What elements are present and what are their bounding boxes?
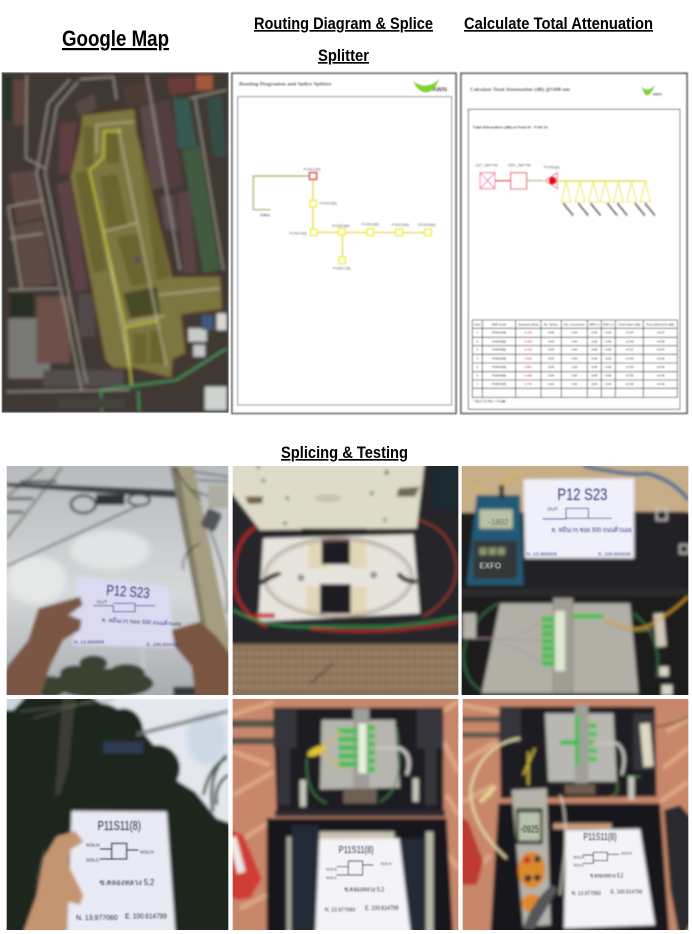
splitter routing schematic: P10S13(8) — [319, 201, 337, 205]
heading: Routing Diagram & Splice Splitter: Splitter — [318, 47, 370, 65]
splitter routing schematic: P10S12(8) — [289, 232, 307, 236]
attenuation table: -17.29 — [625, 382, 634, 386]
meter reading and EXFO brand text: -1802 — [488, 518, 509, 527]
attenuation table: P10S17(8) — [492, 382, 506, 386]
attenuation table: 2 — [476, 339, 478, 343]
attenuation table: 0.00 — [548, 374, 554, 378]
attenuation table: 3 — [476, 348, 478, 352]
green feeder line — [101, 348, 227, 412]
splitter routing schematic: P10S15(8) — [392, 223, 409, 227]
handwritten label: OUT — [97, 599, 107, 605]
handwritten label: N. 13.977060 — [325, 908, 355, 914]
handwritten label: ต. หมื่นเวๆ ซอย 500 ถนนติ่วนอย — [552, 525, 632, 534]
attenuation table: 0.00 — [548, 331, 554, 335]
attenuation table: 0.00 — [548, 339, 554, 343]
attenuation table: 0.989 — [525, 374, 532, 378]
attenuation table: P10S15(8) — [492, 365, 506, 369]
splitter routing schematic: Inline — [260, 212, 271, 217]
photo: closure with splitter and label — [232, 699, 458, 930]
attenuation table: 9.00 — [591, 374, 598, 378]
attenuation table: -14.32 — [656, 365, 665, 369]
attenuation table: -14.29 — [656, 339, 665, 343]
splitter routing schematic: P10S23(8) — [332, 224, 349, 228]
attenuation table: 0.355 — [525, 339, 532, 343]
handwritten label — [325, 845, 399, 914]
icon: AWN logo — [413, 79, 448, 94]
attenuation table: 9.00 — [591, 382, 598, 386]
handwritten label — [76, 819, 167, 922]
yellow routing line — [89, 131, 158, 385]
attenuation table — [472, 320, 677, 403]
heading: Google Map: Google Map — [62, 26, 169, 51]
handwritten label: SOLC — [573, 863, 584, 868]
splitter routing schematic: P10S16(8) — [418, 223, 435, 227]
icon: AWN logo: AWN — [432, 87, 448, 94]
meter reading: -0925 — [520, 824, 539, 835]
attenuation table: P10S12(8) — [492, 339, 506, 343]
roads outside the coverage area — [7, 75, 227, 392]
attenuation table: 4.00 — [571, 374, 578, 378]
attenuation table: 9.00 — [605, 356, 612, 360]
handwritten label: N. 13.860009 — [74, 639, 104, 645]
attenuation table: 4.00 — [571, 356, 578, 360]
diagram title: Routing Diagramm and Splice Splitter — [239, 82, 332, 88]
road lines inside coverage area — [97, 122, 220, 370]
attenuation table: 9.00 — [605, 348, 612, 352]
attenuation table: -14.30 — [656, 356, 665, 360]
optical path schematic: OLT_SMTTM — [476, 163, 498, 167]
splitter routing schematic: P10S14(8) — [361, 223, 379, 227]
attenuation table: 4.00 — [571, 382, 578, 386]
handwritten label: SOLN — [86, 843, 100, 849]
attenuation table: 9.00 — [591, 348, 598, 352]
attenuation table: 0.867 — [525, 365, 532, 369]
panel: calculate total attenuation — [461, 73, 687, 413]
optical path schematic — [476, 163, 655, 216]
attenuation table: SDP L1 — [589, 322, 600, 326]
handwritten label: E. 100.614799 — [611, 889, 642, 895]
handwritten label: ซ.คลองหลวง 5,2 — [344, 887, 385, 894]
attenuation table: -17.27 — [625, 331, 634, 335]
attenuation table: 0.805 — [525, 356, 532, 360]
attenuation table: 9.00 — [591, 339, 598, 343]
splitter routing schematic: P10S17(8) — [333, 266, 350, 270]
heading: Calculate Total Attenuation: Calculate Total Attenuation — [464, 15, 653, 33]
handwritten label — [74, 583, 181, 648]
photo: closure with power meter — [462, 699, 688, 930]
attenuation table: -14.27 — [656, 348, 665, 352]
attenuation table: SDP L2 — [603, 322, 614, 326]
terrain and building rows — [3, 75, 227, 410]
handwritten label: E. 100.604038 — [147, 642, 179, 648]
attenuation table: 9.00 — [591, 331, 598, 335]
handwritten label: SOLC — [86, 858, 100, 864]
handwritten label: ซ.คลองหลวง 5,2 — [590, 873, 624, 880]
handwritten label: SOLH — [140, 849, 154, 855]
attenuation table: -17.29 — [625, 339, 634, 343]
icon: AWN logo small — [641, 85, 662, 96]
panel: Google Map satellite view — [2, 72, 229, 413]
handwritten label: SOLH — [381, 861, 392, 866]
attenuation table: 7 — [476, 382, 478, 386]
panel: routing diagram — [232, 73, 456, 413]
attenuation table: -17.32 — [625, 365, 634, 369]
attenuation table: Item — [474, 322, 481, 326]
attenuation table: 9.00 — [605, 365, 612, 369]
attenuation table: P10S14(8) — [492, 356, 506, 360]
handwritten label — [572, 832, 642, 897]
attenuation table: 6 — [476, 374, 478, 378]
meter reading and EXFO brand text — [479, 518, 509, 570]
handwritten label: SOLN — [326, 866, 337, 871]
attenuation table: -17.30 — [625, 356, 634, 360]
attenuation table: 0.755 — [525, 382, 532, 386]
attenuation table: -17.35 — [625, 374, 634, 378]
handwritten label: P11S11(8) — [339, 845, 374, 856]
attenuation subtitle: Total Attenuation (dB) at Point B : PON 10 — [473, 126, 548, 130]
attenuation table: No. Connector — [564, 322, 585, 326]
attenuation table: 9.00 — [605, 331, 612, 335]
splitter routing schematic — [253, 167, 435, 270]
meter reading and EXFO brand text: EXFO — [479, 561, 501, 570]
attenuation table: 4 — [476, 356, 478, 360]
attenuation table: * OLT Tx Pw = +3 dB — [473, 399, 506, 403]
optical path schematic: P10S1(8) — [544, 165, 559, 169]
attenuation table: Total Atten (dB) — [618, 322, 640, 326]
handwritten label: P12 S23 — [106, 583, 150, 602]
attenuation table: 0.00 — [548, 356, 554, 360]
attenuation table: P10S11(8) — [492, 331, 506, 335]
handwritten label: SOLC — [326, 875, 337, 880]
attenuation table: 4.00 — [571, 348, 578, 352]
heading: Routing Diagram & Splice Splitter: Routing Diagram & Splice — [254, 15, 433, 33]
attenuation table: 4.00 — [571, 331, 578, 335]
attenuation table: 0.446 — [525, 348, 532, 352]
photo: pole with hand-held label P12 S23 — [6, 466, 228, 695]
handwritten label: N. 13.977060 — [572, 891, 601, 897]
heading: Splicing & Testing: Splicing & Testing — [281, 444, 408, 462]
attenuation table: 0.00 — [548, 348, 554, 352]
handwritten label: SOLN — [573, 854, 584, 859]
attenuation title: Calculate Total Attenuation (dB) @1490 nm — [470, 86, 571, 93]
photo: pole in trees with label P11S11(8) — [6, 699, 228, 930]
handwritten label: ซ.คลองหลวง 5,2 — [99, 878, 155, 887]
handwritten label: P12 S23 — [557, 485, 607, 504]
attenuation table: 5 — [476, 365, 478, 369]
handwritten label: OUT — [547, 507, 558, 513]
attenuation table: 9.00 — [605, 339, 612, 343]
attenuation table: P10S16(8) — [492, 374, 506, 378]
attenuation table: 9.00 — [605, 382, 612, 386]
heading: Routing Diagram & Splice Splitter — [254, 15, 433, 65]
attenuation table: Distance (Km) — [518, 322, 538, 326]
attenuation table: -14.35 — [656, 374, 665, 378]
attenuation table: 9.00 — [605, 374, 612, 378]
handwritten label: P11S11(8) — [583, 832, 617, 843]
attenuation table: 4.00 — [571, 339, 578, 343]
attenuation table: 9.00 — [591, 356, 598, 360]
handwritten label: E. 100.604038 — [598, 552, 631, 558]
handwritten label: P11S11(8) — [98, 819, 141, 833]
optical path schematic: ODF_SMTTM — [508, 163, 531, 167]
attenuation table: No. Splice — [544, 322, 559, 326]
attenuation table: -17.27 — [625, 348, 634, 352]
handwritten label: E. 100.614799 — [125, 911, 167, 920]
handwritten label: N. 13.860009 — [527, 552, 557, 558]
attenuation table: 1 — [476, 331, 478, 335]
handwritten label: N. 13.977060 — [76, 913, 118, 922]
attenuation table: 0.00 — [548, 365, 554, 369]
attenuation table: 0.00 — [548, 382, 554, 386]
attenuation table: Pout @Point B (dB) — [647, 322, 674, 326]
photo: EXFO power meter with label — [462, 466, 688, 695]
handwritten label: SOLH — [621, 850, 632, 855]
attenuation table: -14.27 — [656, 331, 665, 335]
attenuation table: -14.29 — [656, 382, 665, 386]
handwritten label — [527, 485, 632, 558]
splitter routing schematic: P10S11(8) — [303, 167, 321, 171]
attenuation table: 0.197 — [525, 331, 532, 335]
attenuation table: 9.00 — [591, 365, 598, 369]
photo: open splice tray — [232, 466, 458, 695]
coverage area polygon — [70, 108, 223, 378]
handwritten label: E. 100.614799 — [365, 906, 399, 912]
attenuation table: ODP Code — [492, 322, 507, 326]
attenuation table: P10S13(8) — [492, 348, 506, 352]
handwritten label: ต. หมื่นเวๆ ซอย 500 ถนนติ่วนอย — [102, 616, 181, 628]
attenuation table: 4.00 — [571, 365, 578, 369]
icon: AWN logo small: AWN — [652, 91, 662, 96]
